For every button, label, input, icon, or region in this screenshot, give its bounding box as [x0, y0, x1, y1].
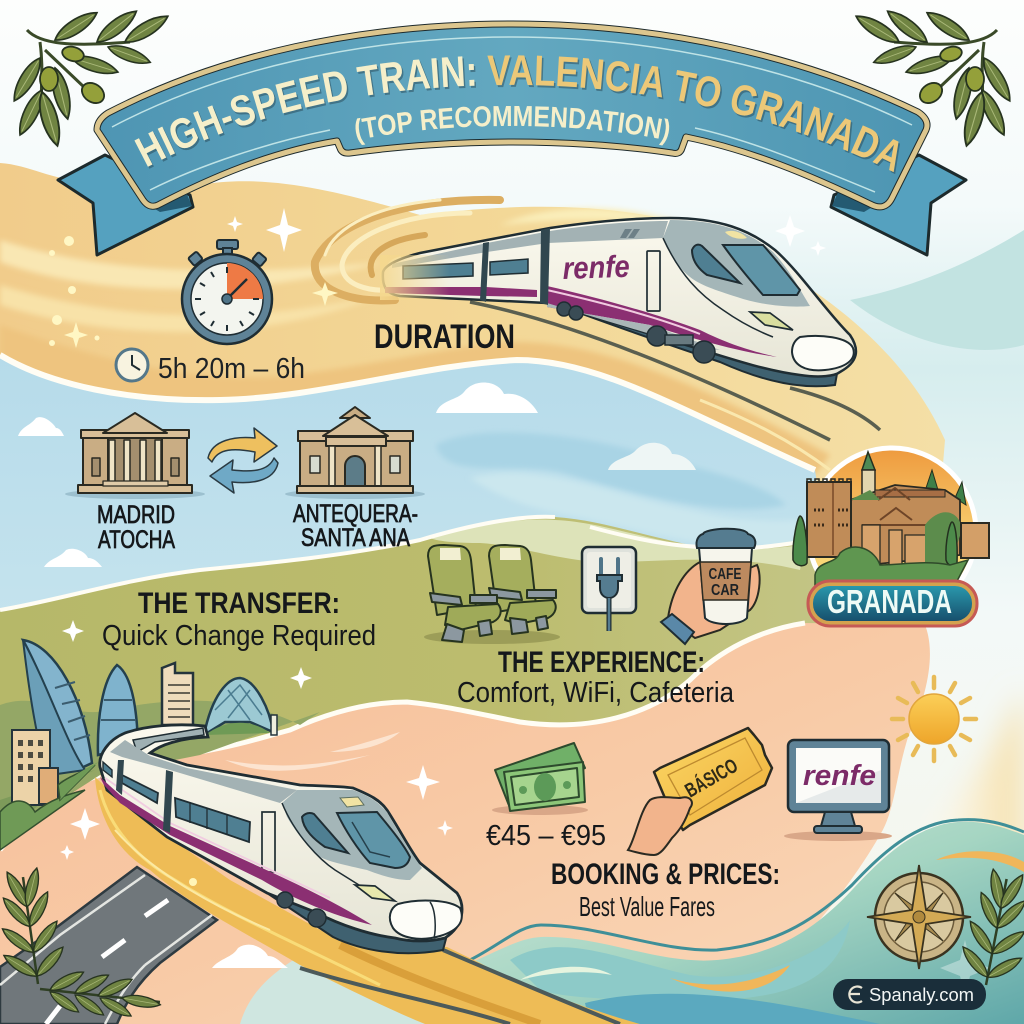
top train: [380, 218, 880, 440]
train windows: [403, 263, 473, 279]
train windscreen: [337, 812, 410, 868]
train body: [100, 725, 462, 941]
banner body: [97, 24, 927, 207]
train roof: [110, 740, 297, 803]
stopwatch icon: [182, 240, 272, 344]
transfer text: THE TRANSFER:: [138, 587, 340, 620]
coffee cup icon: [661, 529, 760, 644]
olive sprig bottom right: [953, 864, 1024, 991]
sparkles: [60, 208, 990, 996]
train skirt: [267, 893, 447, 953]
experience text: Comfort, WiFi, Cafeteria: [457, 677, 735, 709]
title banner: HIGH-SPEED TRAIN: VALENCIA TO GRANADA: [134, 55, 898, 172]
Spanaly badge: Spanaly.com: [869, 985, 974, 1005]
banner ribbon tail right: [831, 155, 966, 255]
train purple stripes: [385, 287, 537, 297]
Madrid label: ATOCHA: [98, 526, 175, 554]
train body: [383, 218, 856, 376]
train wheels: [557, 302, 715, 363]
train roof: [392, 221, 668, 268]
olive sprig bottom left vertical: [0, 863, 71, 989]
train connectors: [480, 228, 550, 305]
Spanaly badge: [833, 979, 986, 1010]
bottom train: [100, 725, 462, 953]
plug icon: [582, 547, 636, 631]
olive branch top left: [8, 6, 171, 148]
ribbon fold shadows: [150, 190, 874, 212]
seats icon: [424, 545, 560, 644]
road: [0, 867, 217, 1024]
coffee cup icon: CAFE: [708, 566, 742, 583]
Madrid label: [97, 501, 175, 554]
Madrid label: MADRID: [97, 501, 175, 529]
station: Antequera-Santa Ana: [285, 407, 425, 499]
duration heading: DURATION: [374, 318, 515, 356]
train nose and headlight: [390, 901, 462, 939]
Antequera label: SANTA ANA: [301, 524, 410, 552]
Granada label: GRANADA: [827, 583, 952, 620]
banner ribbon tail left: [58, 155, 193, 255]
experience text: [457, 646, 735, 709]
title text: HIGH-SPEED TRAIN: VALENCIA TO GRANADA: [140, 57, 900, 174]
ticket icon: [628, 728, 772, 855]
title banner: [56, 20, 968, 257]
train connectors: [116, 760, 173, 833]
clouds: [18, 382, 696, 968]
olive sprig bottom left horizontal: [40, 968, 161, 1020]
ticket icon: BÁSICO: [681, 754, 742, 802]
train skirt: [545, 300, 838, 386]
glitter sparkles: [49, 236, 338, 348]
far carriages: [133, 728, 204, 752]
transfer text: Quick Change Required: [102, 620, 376, 652]
small clock icon: [116, 349, 148, 381]
renfe logo: renfe: [562, 249, 630, 286]
station: Madrid Atocha: [65, 413, 205, 499]
Granada badge: [793, 448, 989, 626]
booking text: BOOKING & PRICES:: [551, 858, 780, 891]
swap arrows: [208, 428, 278, 493]
olive branch top right: [853, 6, 1016, 148]
price text: €45 – €95: [486, 820, 606, 852]
transfer text: [102, 587, 376, 652]
booking text: Best Value Fares: [579, 891, 715, 922]
coffee cup icon: CAR: [711, 582, 739, 599]
tail fade: [380, 255, 450, 300]
Antequera label: ANTEQUERA-: [293, 500, 418, 528]
booking text: [551, 858, 780, 922]
experience text: THE EXPERIENCE:: [498, 646, 705, 679]
train nose and headlight: [792, 336, 854, 370]
train windscreen: [723, 245, 800, 295]
duration time: 5h 20m – 6h: [158, 353, 305, 385]
money icon: [492, 743, 588, 815]
train rails: [470, 302, 880, 440]
computer icon: [784, 740, 892, 841]
train purple stripe: [100, 777, 372, 925]
train windows: [175, 798, 250, 842]
yellow speed swooshes: [315, 200, 500, 300]
title subtitle: (TOP RECOMMENDATION): [356, 106, 670, 146]
compass icon: [867, 865, 971, 969]
sun icon: [892, 677, 976, 761]
Antequera label: [293, 500, 418, 552]
train wheels: [277, 892, 326, 927]
city skyline: [0, 640, 320, 850]
Granada label: [808, 581, 977, 626]
yellow track bottom: [95, 777, 640, 1024]
computer icon: renfe: [803, 760, 876, 792]
